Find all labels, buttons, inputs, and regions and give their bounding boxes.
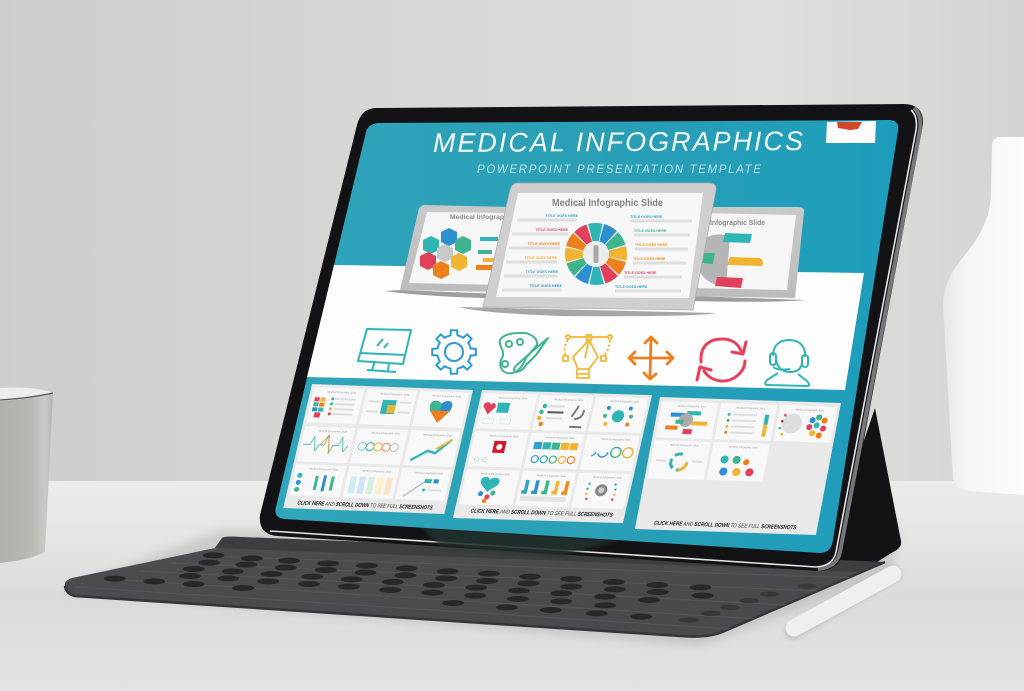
call to action: CLICK HERE AND SCROLL DOWN TO SEE FULL SCREENSHOTS: [297, 501, 433, 511]
keyboard: [65, 537, 885, 637]
lid: [483, 183, 716, 310]
thumbnail row 2: [297, 426, 460, 467]
thumbnail row 2: Medical Infographic Slide: [601, 437, 632, 442]
thumbnail row 3: Medical Infographic Slide: [593, 475, 623, 480]
left callouts: TITLE GOES HERE: [536, 228, 569, 232]
thumbnail row 3: [289, 464, 451, 501]
base: [690, 296, 806, 302]
thumbnail row 3: Medical Infographic Slide: [481, 472, 511, 476]
subtitle: POWERPOINT PRESENTATION TEMPLATE: [477, 164, 761, 176]
white band: [307, 265, 864, 390]
thumbnail row 1: Medical Infographic Slide: [327, 390, 357, 395]
panel: screenshots column 2: [453, 390, 652, 523]
left callouts: TITLE GOES HERE: [530, 284, 563, 288]
green card: [702, 253, 715, 264]
display: [690, 213, 796, 290]
red card: [715, 277, 743, 288]
icon: gear: [432, 330, 476, 374]
heading: Medical Infographic: [450, 214, 514, 221]
thumbnail row 1: Medical Infographic Slide: [795, 408, 825, 412]
base: [459, 307, 716, 316]
powerpoint badge: [826, 121, 876, 143]
thumbnail row 1: Medical Infographic Slide: [554, 397, 584, 402]
thumbnail row 2: Medical Infographic Slide: [545, 435, 576, 440]
right callouts: TITLE GOES HERE: [633, 257, 666, 261]
icon: headset person: [765, 340, 809, 386]
icon: pen tool: [563, 335, 612, 378]
display: [496, 193, 703, 298]
left callouts: [502, 214, 579, 292]
stylus pencil: [793, 574, 893, 631]
thumbnail row 1: [476, 393, 648, 433]
thumbnail row 1: Medical Infographic Slide: [610, 399, 640, 404]
small bars: [476, 237, 498, 270]
panel: screenshots column 3: [635, 397, 841, 535]
thumbnail row 1: [306, 387, 469, 428]
thumbnail row 3: Medical Infographic Slide: [537, 473, 567, 478]
left callouts: TITLE GOES HERE: [546, 214, 579, 218]
base: [384, 290, 500, 298]
thumbnail row 1: Medical Infographic Slide: [677, 404, 707, 409]
thumbnail row 1: [655, 401, 837, 443]
right callouts: TITLE GOES HERE: [630, 215, 663, 219]
left callouts: TITLE GOES HERE: [525, 256, 558, 260]
lid: [400, 205, 510, 292]
thumbnail row 2: Medical Infographic Slide: [318, 429, 348, 434]
hexagon diagram: [420, 228, 471, 279]
keyboard ribs: [75, 556, 860, 630]
thumbnail row 3: Medical Infographic Slide: [362, 469, 392, 474]
thumbnail row 2: Medical Infographic Slide: [729, 445, 759, 450]
thumbnail row 3: Medical Infographic Slide: [414, 471, 444, 476]
icon: move arrows: [629, 337, 673, 379]
title: MEDICAL INFOGRAPHICS: [433, 126, 803, 158]
teal card: [723, 233, 752, 243]
center laptop: [459, 183, 716, 316]
heading: Infographic Slide: [710, 220, 765, 227]
left callouts: TITLE GOES HERE: [526, 270, 559, 274]
thumbnail row 2: [468, 431, 640, 471]
right callouts: TITLE GOES HERE: [624, 271, 657, 275]
left laptop: [384, 205, 514, 298]
tablet silver edge: [270, 110, 916, 567]
thumbnail row 2: Medical Infographic Slide: [489, 434, 520, 438]
bezel reflection: [420, 526, 620, 556]
thumbnail row 3: Medical Infographic Slide: [309, 467, 339, 472]
shadow under tablet and keyboard: [60, 530, 900, 646]
thumbnail row 1: Medical Infographic Slide: [736, 406, 766, 411]
right laptop: [680, 207, 806, 302]
thumbnail row 1: Medical Infographic Slide: [498, 396, 528, 400]
display: [409, 212, 512, 285]
call to action: CLICK HERE AND SCROLL DOWN TO SEE FULL SCREENSHOTS: [653, 521, 797, 531]
right callouts: TITLE GOES HERE: [635, 243, 668, 247]
thumbnail row 1: Medical Infographic Slide: [432, 394, 462, 399]
tablet screen: [275, 120, 898, 553]
icon: monitor: [358, 329, 411, 372]
vase: [943, 137, 1024, 495]
thumbnail row 2: [648, 440, 770, 482]
tablet gray side strip: [818, 108, 920, 569]
call to action: CLICK HERE AND SCROLL DOWN TO SEE FULL SCREENSHOTS: [470, 509, 613, 519]
icon: palette: [500, 333, 548, 373]
tablet body: [260, 104, 923, 571]
heading: Medical Infographic Slide: [552, 198, 663, 209]
thumbnail row 3: [459, 469, 631, 509]
thumbnail row 1: Medical Infographic Slide: [380, 392, 410, 397]
yellow pill: [727, 257, 763, 266]
thumbnail row 2: Medical Infographic Slide: [423, 433, 453, 438]
thumbnail row 2: Medical Infographic Slide: [670, 443, 700, 448]
left callouts: TITLE GOES HERE: [528, 242, 561, 246]
right callouts: TITLE GOES HERE: [634, 229, 667, 233]
panel: screenshots column 1: [283, 384, 473, 514]
keyboard keys: [104, 552, 817, 623]
mug: [0, 388, 53, 563]
wheel diagram: [565, 223, 627, 285]
lid: [680, 207, 804, 298]
right callouts: TITLE GOES HERE: [615, 285, 648, 289]
thumbnail row 2: Medical Infographic Slide: [371, 431, 401, 436]
gray capsule: [700, 234, 730, 286]
wall background: [0, 0, 1024, 483]
right callouts: [615, 215, 692, 292]
icon: refresh arrows: [697, 339, 746, 381]
stand of tablet folio: [820, 408, 901, 574]
table surface: [0, 481, 1024, 691]
